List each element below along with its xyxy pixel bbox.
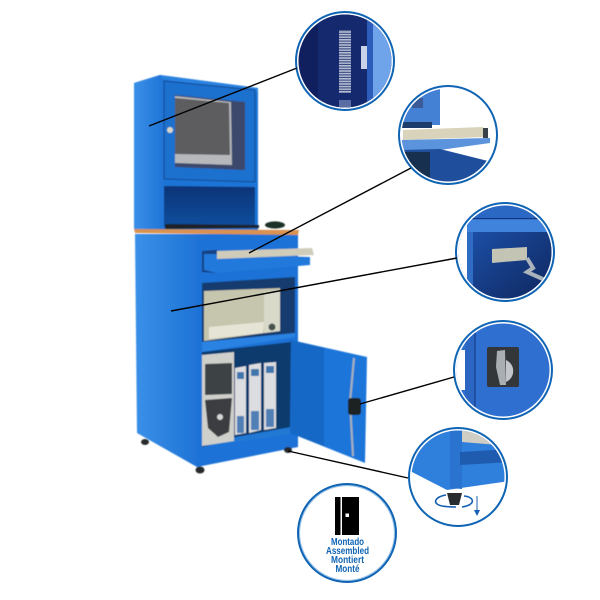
door lock: [167, 127, 173, 133]
binders: [235, 362, 276, 435]
detail circle: adjustable foot: [409, 428, 510, 528]
open door: [290, 340, 367, 463]
badge: assembled: [298, 484, 396, 582]
foot and arrows: [447, 493, 462, 505]
printer bay: [202, 277, 295, 342]
badge label: [326, 537, 369, 575]
drawer handle: [217, 248, 314, 259]
badge label: Montiert: [331, 555, 365, 566]
upper cabinet: [134, 75, 258, 230]
badge label: Assembled: [326, 546, 369, 557]
lower bay: [202, 342, 291, 447]
base front panel: [197, 234, 298, 467]
door lock: [348, 398, 361, 415]
detail circle: drawer handle: [399, 85, 500, 190]
computer tower: [202, 352, 234, 446]
detail circle: power strip: [455, 200, 555, 304]
leader lines: [149, 68, 457, 478]
drawer: [202, 248, 314, 273]
monitor door: [164, 81, 255, 182]
feet: [141, 439, 292, 474]
keyboard: [165, 224, 259, 229]
worktop: [134, 229, 299, 235]
monitor: [175, 96, 232, 165]
badge label: Montado: [331, 537, 364, 548]
detail circle: ventilation slots: [296, 10, 398, 114]
shelf edge: [202, 333, 295, 352]
keyboard bay: [164, 186, 255, 228]
cabinet: [134, 75, 367, 474]
monitor window: [175, 95, 245, 170]
door rod: [350, 358, 354, 456]
mouse: [265, 221, 285, 229]
base side panel: [135, 234, 197, 467]
printer: [204, 288, 280, 341]
detail circle: door lock: [454, 320, 554, 420]
icon: cabinet door: [335, 497, 359, 535]
badge label: Monté: [336, 564, 360, 575]
